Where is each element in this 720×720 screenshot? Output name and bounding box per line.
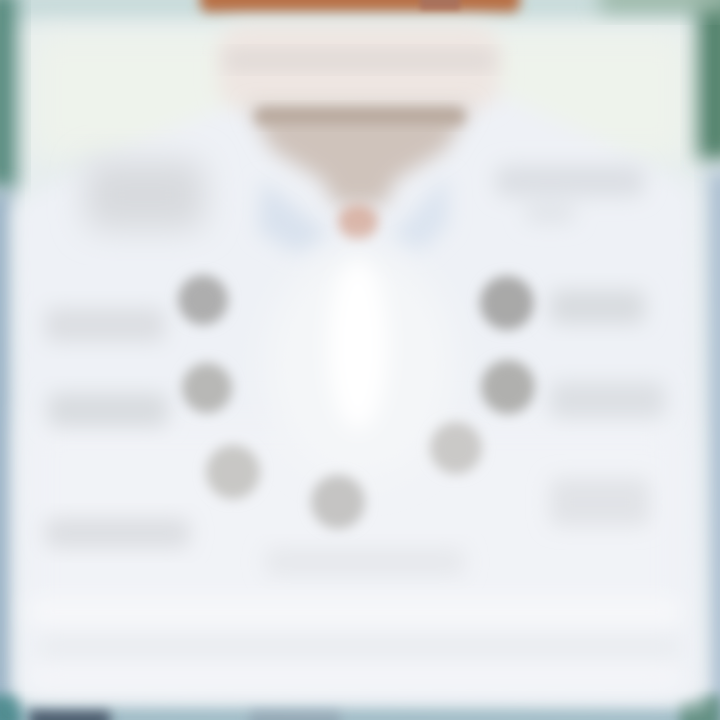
text block: right row 3: [550, 478, 650, 526]
text block: left row 3: [45, 518, 190, 548]
text block: left row 2: [48, 393, 168, 427]
text block: right row 1: [550, 290, 645, 324]
icon: grey circle 3: [182, 363, 232, 413]
text block: left row 1: [45, 308, 165, 342]
icon: grey circle 4: [481, 360, 535, 414]
top left heading smudge: [85, 160, 205, 230]
icon: grey circle 2: [480, 276, 534, 330]
text block: center caption: [265, 548, 465, 576]
portrait: face and neck: [200, 0, 520, 240]
central glowing highlight: [265, 250, 455, 480]
shirt collar: [258, 175, 448, 255]
icon: grey circle 6: [430, 422, 482, 474]
icon: grey circle 1: [178, 275, 228, 325]
icon: grey circle 5: [206, 445, 260, 499]
top right heading smudge: [495, 165, 645, 223]
text block: right row 2: [550, 382, 665, 418]
footer text band: [30, 600, 680, 686]
icon: grey circle 7: [311, 475, 365, 529]
